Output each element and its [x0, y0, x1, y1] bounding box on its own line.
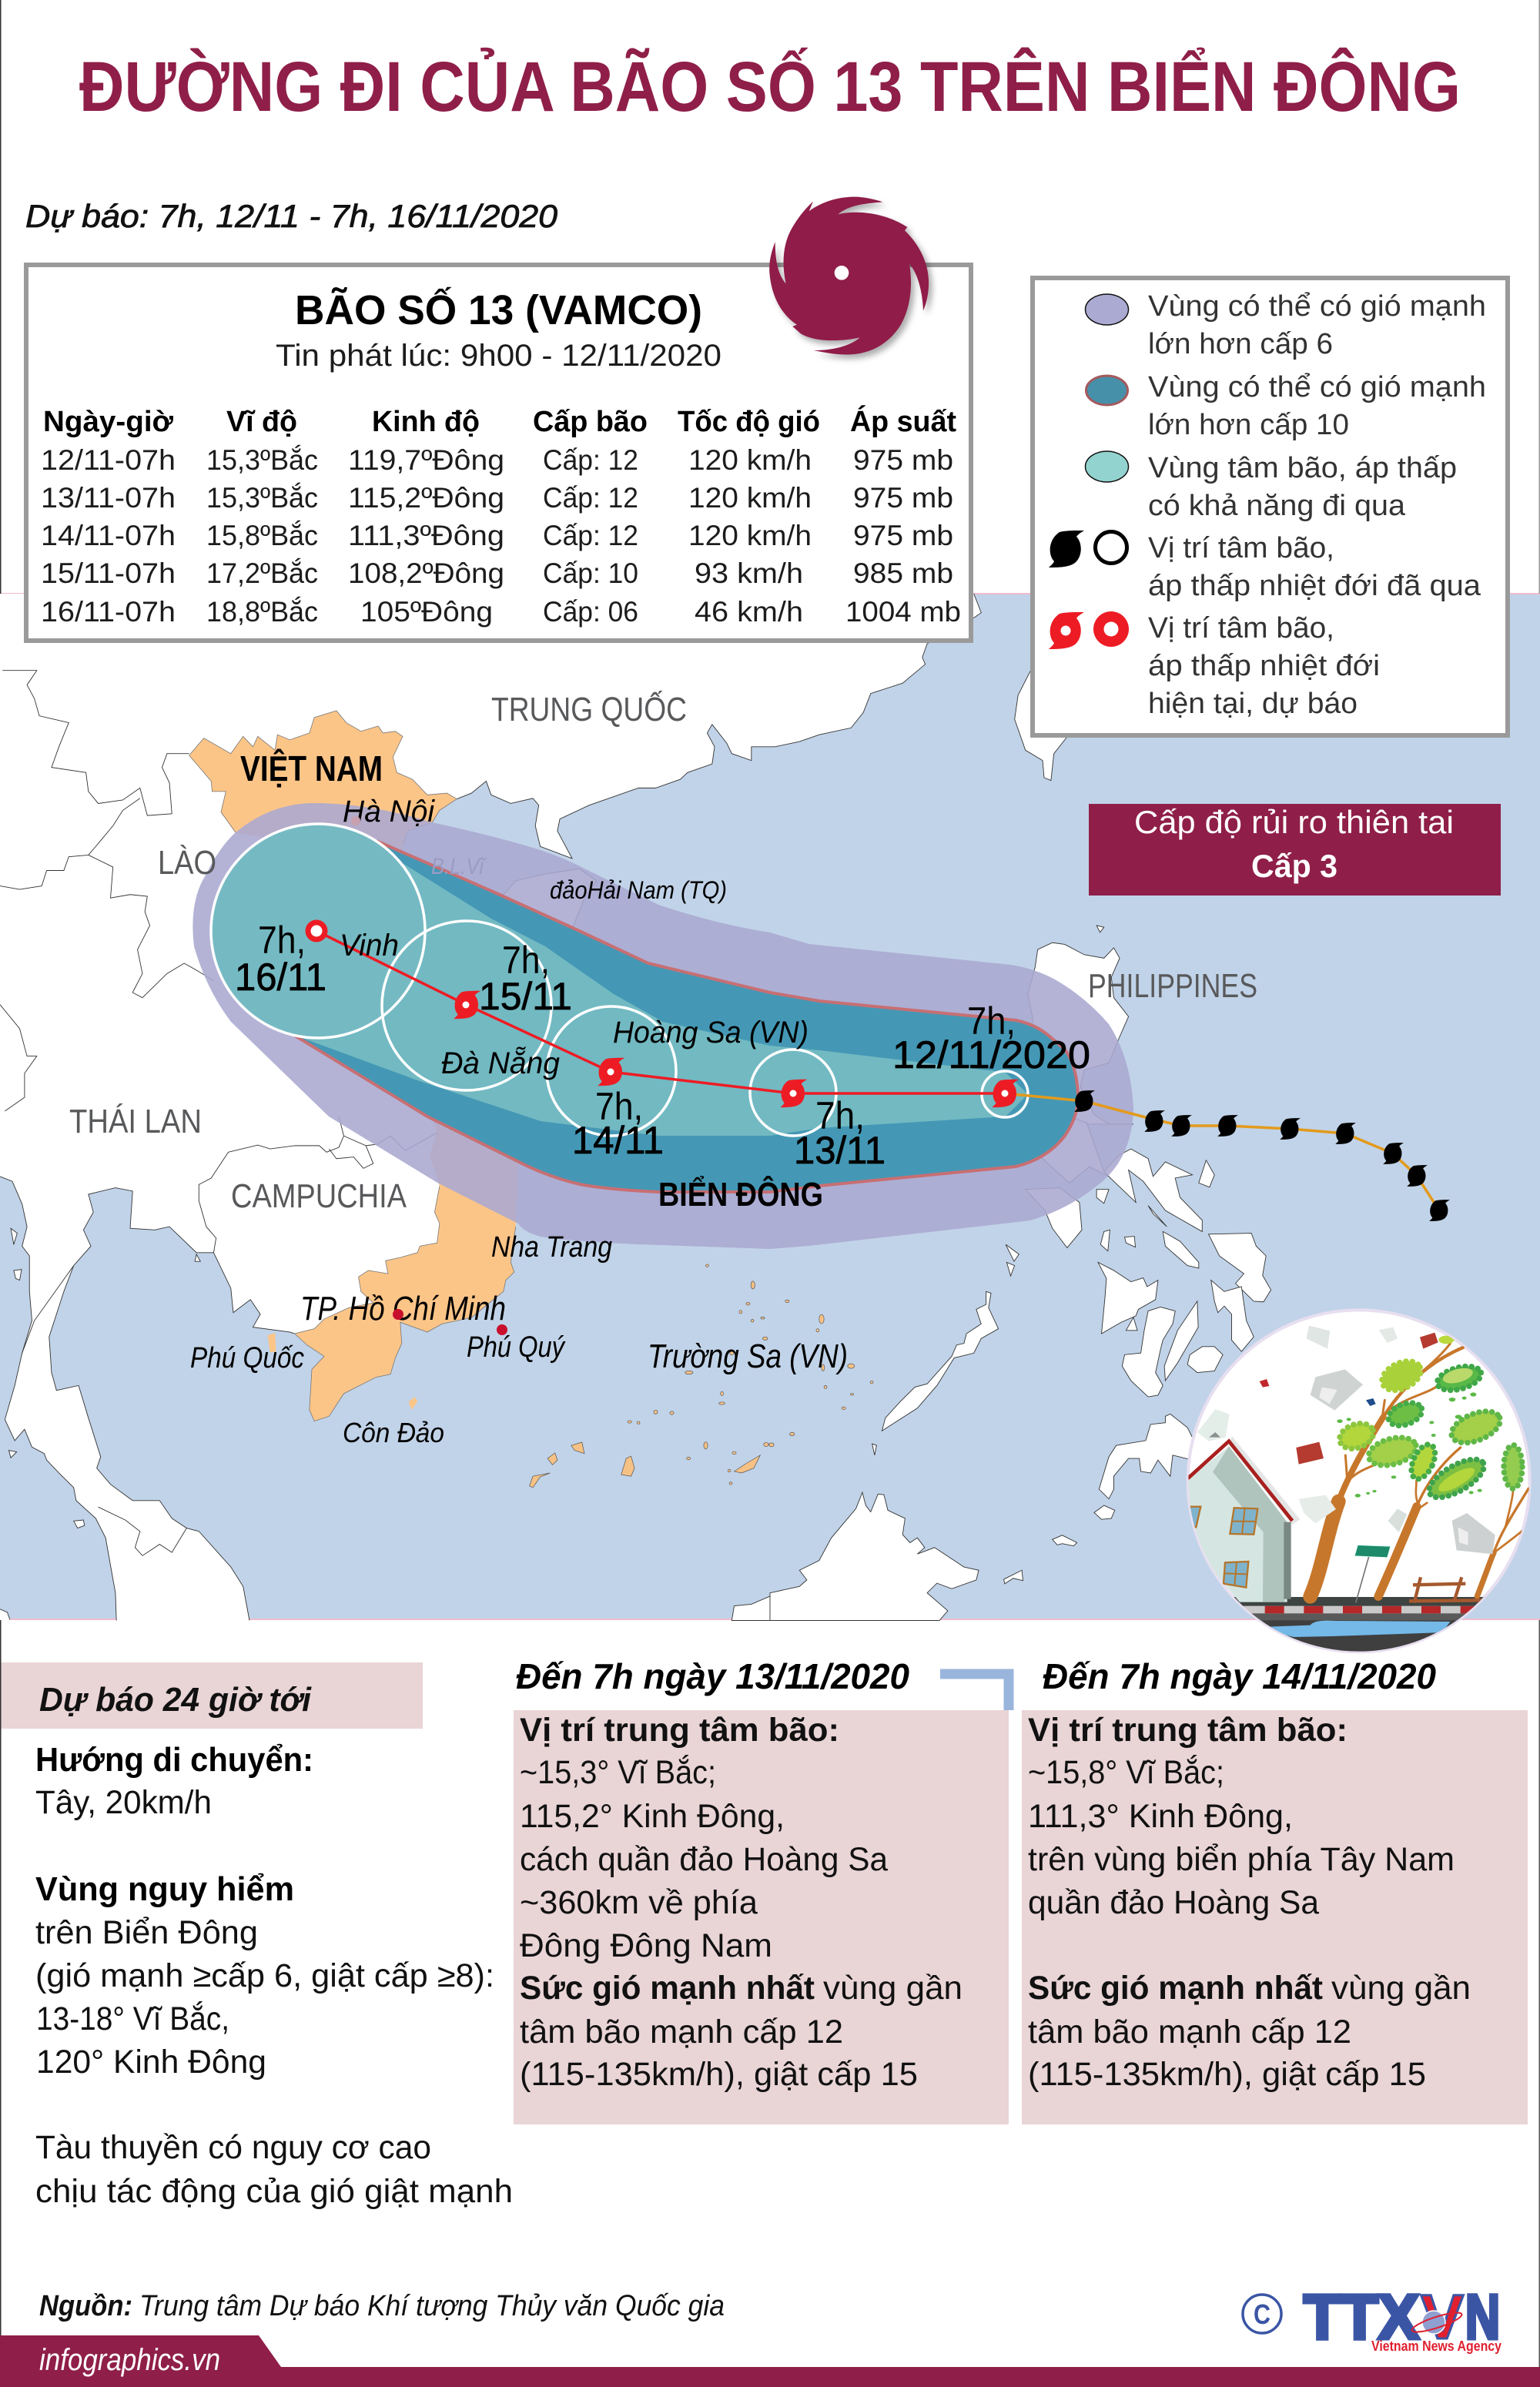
table row 13/11: 13/11-07h — [41, 482, 176, 514]
forecast period heading: Dự báo: 7h, 12/11 - 7h, 16/11/2020 — [25, 198, 558, 234]
country labels: THÁI LAN — [69, 1103, 202, 1140]
place labels: Côn Đảo — [343, 1417, 444, 1448]
forecast circle 15/11 — [382, 921, 551, 1090]
storm wind zones — [192, 803, 1133, 1249]
table title: BÃO SỐ 13 (VAMCO) — [295, 287, 702, 333]
text block: movement direction — [35, 1741, 313, 1821]
legend: past positions: Vị trí tâm bão, — [1148, 532, 1334, 564]
date labels along the track — [235, 919, 1090, 1172]
panel: forecast to 14/11: quần đảo Hoàng Sa — [1028, 1884, 1319, 1921]
Philippines islands — [1028, 926, 1133, 1124]
panel: 24-hour forecast heading: Dự báo 24 giờ tới — [39, 1681, 312, 1719]
panel: forecast to 13/11: Sức gió mạnh nhất — [520, 1970, 815, 2007]
table header row: Cấp bão — [533, 406, 648, 438]
country labels: CAMPUCHIA — [231, 1177, 407, 1215]
logo: TTXVN: C — [1254, 2298, 1270, 2330]
date labels along the track: 7h, — [502, 939, 550, 982]
date labels along the track: 15/11 — [479, 975, 572, 1018]
table row 12/11: 119,7ºĐông — [348, 444, 504, 476]
Vietnam territory — [189, 711, 508, 1117]
panel: forecast to 13/11: Đông Đông Nam — [520, 1927, 772, 1964]
table row 12/11: 975 mb — [853, 444, 953, 476]
legend: storm centre zone — [1086, 451, 1457, 522]
footer band: infographics.vn — [39, 2343, 220, 2377]
table row 16/11: 18,8ºBắc — [206, 596, 318, 628]
text block: shipping warning: Tàu thuyền có nguy cơ cao — [35, 2129, 431, 2166]
legend — [1033, 278, 1508, 735]
panel: forecast to 14/11: 111,3° Kinh Đông, — [1028, 1798, 1293, 1835]
table row 14/11: 111,3ºĐông — [348, 520, 504, 551]
date labels along the track: 12/11/2020 — [892, 1033, 1090, 1076]
legend: gale zone above level 10: lớn hơn cấp 10 — [1148, 409, 1349, 441]
forecast circle 16/11 — [211, 824, 425, 1038]
legend: gale zone above level 10 — [1086, 371, 1486, 441]
source line: Trung tâm Dự báo Khí tượng Thủy văn Quốc gia — [139, 2290, 725, 2322]
place labels: Trường Sa (VN) — [648, 1337, 848, 1375]
panel: 24-hour forecast heading — [0, 1662, 423, 1729]
table row 13/11: Cấp: 12 — [543, 482, 638, 514]
table row 14/11: Cấp: 12 — [543, 520, 638, 551]
table row 13/11: 115,2ºĐông — [348, 482, 504, 514]
date labels along the track: 7h, — [595, 1085, 643, 1128]
logo: TTXVN: V — [1421, 2282, 1464, 2352]
country labels: LÀO — [158, 844, 216, 882]
date labels along the track: 13/11 — [794, 1129, 886, 1172]
forecast circle 13/11 — [750, 1050, 836, 1136]
forecast circle 12/11 — [982, 1071, 1028, 1117]
table row 14/11: 120 km/h — [688, 520, 812, 551]
table header row: Vĩ độ — [226, 406, 297, 438]
map of the East Sea region — [0, 593, 1540, 1620]
place labels: Hoàng Sa (VN) — [613, 1016, 808, 1050]
legend: gale zone above level 6 — [1086, 290, 1486, 360]
table header row — [43, 404, 956, 438]
panel: forecast to 13/11: ~360km về phía — [520, 1884, 758, 1921]
place labels: Hà Nội — [343, 795, 435, 829]
text block: shipping warning — [35, 2129, 513, 2210]
table row 16/11: 105ºĐông — [360, 596, 493, 628]
legend: gale zone above level 6: lớn hơn cấp 6 — [1148, 328, 1333, 360]
date labels along the track: 16/11 — [235, 956, 326, 999]
forecast circle 14/11 — [547, 1006, 676, 1136]
panel: forecast to 13/11: 115,2° Kinh Đông, — [520, 1798, 785, 1835]
text block: danger zone — [35, 1870, 494, 2081]
panel: forecast to 14/11: trên vùng biển phía Tây Nam — [1028, 1841, 1455, 1878]
table row 14/11: 15,8ºBắc — [206, 520, 318, 551]
logo: TTXVN: TTX — [1304, 2282, 1419, 2352]
risk level box: Cấp độ rủi ro thiên tai — [1134, 804, 1454, 840]
table row 15/11: 15/11-07h — [41, 557, 176, 589]
panel: forecast to 13/11: cách quần đảo Hoàng Sa — [520, 1841, 888, 1878]
table row 15/11: 93 km/h — [695, 557, 803, 589]
logo: TTXVN: N — [1465, 2282, 1500, 2352]
table header row: Áp suất — [850, 404, 956, 438]
zone: winds above level 10 — [295, 842, 1078, 1192]
panel: forecast to 14/11 — [1022, 1710, 1528, 2124]
logo: TTXVN — [1243, 2282, 1502, 2354]
table header row: Kinh độ — [372, 406, 480, 438]
place labels: B.L.Vĩ — [431, 854, 487, 879]
table row 16/11: 46 km/h — [695, 596, 803, 628]
country labels: PHILIPPINES — [1088, 967, 1257, 1005]
legend: current and forecast positions: áp thấp nhiệt đới — [1148, 650, 1380, 682]
legend: current and forecast positions — [1049, 611, 1380, 720]
text block: shipping warning: chịu tác động của gió giật mạnh — [35, 2173, 513, 2210]
panel: forecast to 14/11: (115-135km/h), giật cấp 15 — [1028, 2056, 1426, 2093]
date labels along the track: 7h, — [815, 1094, 865, 1137]
panel: forecast to 13/11: ~15,3° Vĩ Bắc; — [520, 1754, 716, 1791]
text block: danger zone: (gió mạnh ≥cấp 6, giật cấp ≥8): — [35, 1957, 494, 1994]
table row 16/11 — [41, 596, 961, 628]
legend: gale zone above level 10: Vùng có thể có gió mạnh — [1148, 371, 1486, 403]
panel: forecast to 13/11 — [514, 1710, 1009, 2124]
table row 12/11: 12/11-07h — [41, 444, 176, 476]
forecast storm track — [305, 919, 1019, 1107]
table row 15/11: 985 mb — [853, 557, 953, 589]
table row 13/11: 975 mb — [853, 482, 953, 514]
table row 13/11: 15,3ºBắc — [206, 482, 318, 514]
text block: danger zone: 120° Kinh Đông — [36, 2044, 266, 2081]
northern land mass — [0, 594, 981, 1117]
panel: forecast to 14/11: tâm bão mạnh cấp 12 — [1028, 2014, 1351, 2051]
zone: storm centre corridor — [254, 857, 1028, 1136]
legend: current and forecast positions: hiện tại, dự báo — [1148, 688, 1358, 720]
southern land mass — [0, 1116, 770, 1620]
legend: current and forecast positions: Vị trí tâm bão, — [1148, 612, 1334, 644]
date labels along the track: 14/11 — [572, 1119, 664, 1162]
table row 12/11 — [41, 444, 953, 476]
country labels: VIỆT NAM — [240, 748, 383, 788]
legend: storm centre zone: có khả năng đi qua — [1148, 490, 1406, 522]
text block: danger zone: trên Biển Đông — [35, 1914, 258, 1951]
place labels: Đà Nẵng — [441, 1046, 560, 1080]
text block: danger zone: Vùng nguy hiểm — [35, 1870, 294, 1908]
table row 14/11 — [41, 520, 953, 551]
table row 13/11 — [41, 482, 953, 514]
place labels: Phú Quý — [467, 1331, 566, 1364]
risk level box — [1089, 804, 1501, 896]
logo: TTXVN: Vietnam News Agency — [1371, 2338, 1502, 2354]
text block: danger zone: 13-18° Vĩ Bắc, — [36, 2000, 229, 2037]
Hainan and Taiwan islands — [489, 637, 1105, 956]
legend: storm centre zone: Vùng tâm bão, áp thấp — [1148, 452, 1457, 484]
storm data table panel — [26, 265, 971, 641]
place labels: Nha Trang — [491, 1231, 612, 1264]
risk level box: Cấp 3 — [1251, 848, 1337, 884]
table row 15/11 — [41, 557, 953, 589]
footer band — [0, 2335, 1540, 2387]
text block: movement direction: Hướng di chuyển: — [35, 1741, 313, 1779]
corner bracket — [940, 1674, 1009, 1710]
table row 16/11: Cấp: 06 — [543, 596, 638, 628]
panel: forecast to 13/11: vùng gần — [823, 1970, 962, 2007]
place labels — [190, 795, 848, 1448]
panel: forecast to 14/11: vùng gần — [1331, 1970, 1471, 2007]
past storm track — [1005, 1090, 1450, 1221]
table row 15/11: 17,2ºBắc — [206, 557, 318, 589]
country labels: BIỂN ĐÔNG — [658, 1174, 823, 1214]
country labels: TRUNG QUỐC — [491, 689, 687, 728]
table row 16/11: 1004 mb — [845, 596, 961, 628]
table row 12/11: 120 km/h — [688, 444, 812, 476]
country labels — [69, 689, 1257, 1215]
table row 15/11: Cấp: 10 — [543, 557, 638, 589]
legend: gale zone above level 6: Vùng có thể có gió mạnh — [1148, 290, 1486, 323]
icon: storm emblem — [769, 197, 929, 354]
illustration: house and trees in a storm — [1170, 1310, 1540, 1665]
table row 12/11: 15,3ºBắc — [206, 444, 318, 476]
panel: forecast to 13/11: (115-135km/h), giật cấp 15 — [520, 2056, 918, 2093]
table row 12/11: Cấp: 12 — [543, 444, 638, 476]
table row 14/11: 975 mb — [853, 520, 953, 551]
text block: movement direction: Tây, 20km/h — [35, 1784, 212, 1821]
panel: forecast to 14/11: ~15,8° Vĩ Bắc; — [1028, 1754, 1224, 1791]
panel: forecast to 14/11: Sức gió mạnh nhất — [1028, 1970, 1323, 2007]
table row 14/11: 14/11-07h — [41, 520, 176, 551]
table header row: Tốc độ gió — [678, 406, 820, 438]
place labels: Phú Quốc — [190, 1342, 304, 1374]
table header row: Ngày-giờ — [43, 406, 174, 438]
table row 16/11: 16/11-07h — [41, 596, 176, 628]
table row 13/11: 120 km/h — [688, 482, 812, 514]
table row 15/11: 108,2ºĐông — [348, 557, 504, 589]
date labels along the track: 7h, — [967, 999, 1016, 1043]
issued time: Tin phát lúc: 9h00 - 12/11/2020 — [276, 339, 721, 373]
place labels: TP. Hồ Chí Minh — [300, 1290, 506, 1327]
legend: past positions — [1049, 531, 1481, 602]
heading: forecast to 14/11: Đến 7h ngày 14/11/2020 — [1043, 1656, 1436, 1696]
source line: Nguồn: — [39, 2290, 132, 2322]
place labels: đảoHải Nam (TQ) — [550, 876, 727, 904]
legend: past positions: áp thấp nhiệt đới đã qua — [1148, 570, 1481, 602]
zone: winds above level 6 — [192, 803, 1133, 1249]
heading: forecast to 13/11: Đến 7h ngày 13/11/2020 — [516, 1656, 909, 1696]
date labels along the track: 7h, — [258, 919, 306, 962]
panel: forecast to 13/11: Vị trí trung tâm bão: — [520, 1712, 839, 1749]
place labels: Vinh — [340, 929, 399, 962]
panel: forecast to 14/11: Vị trí trung tâm bão: — [1028, 1712, 1348, 1749]
panel: forecast to 13/11: tâm bão mạnh cấp 12 — [520, 2014, 843, 2051]
